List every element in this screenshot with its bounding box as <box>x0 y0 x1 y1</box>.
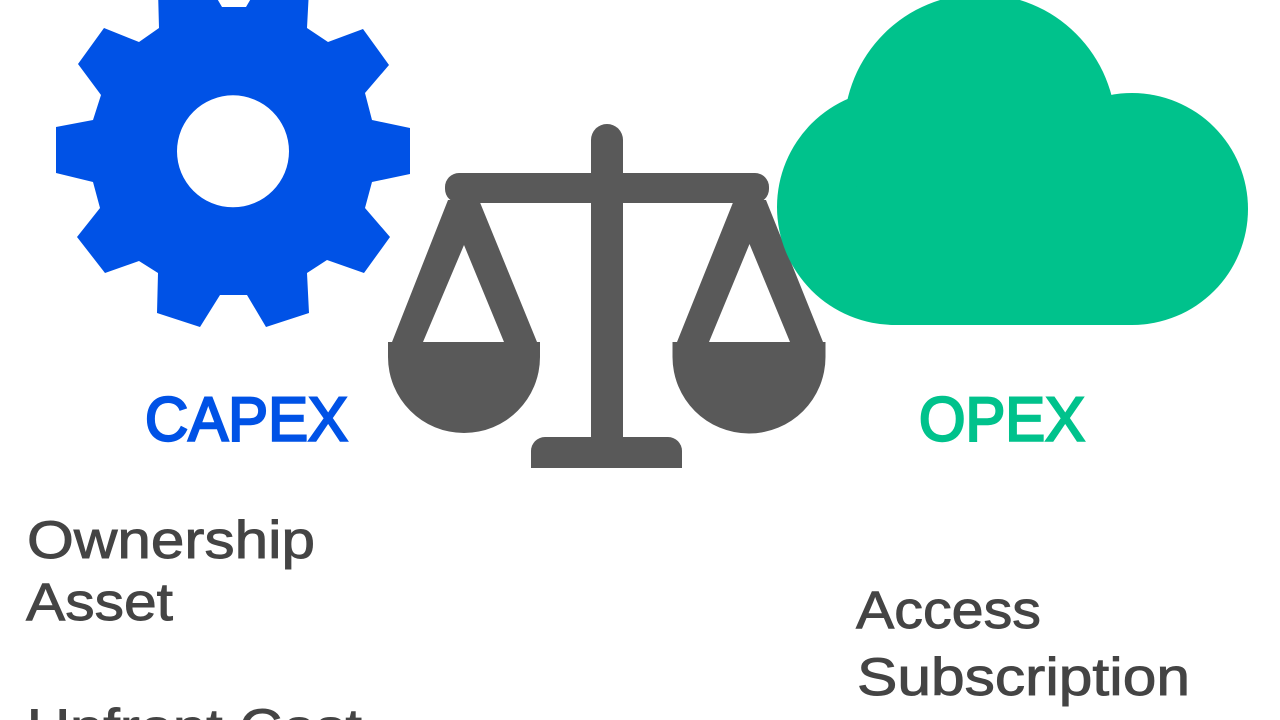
label: Ownership: Ownership <box>27 511 315 570</box>
heading: CAPEX: CAPEX <box>145 386 348 454</box>
label: Asset: Asset <box>26 573 173 632</box>
cloud left lobe <box>777 89 1013 325</box>
scale beam <box>445 173 769 203</box>
left scale pan <box>388 200 540 433</box>
cloud middle lobe <box>844 0 1116 266</box>
scale base <box>531 437 682 468</box>
icon: cloud <box>777 0 1248 325</box>
scale post <box>591 124 623 440</box>
right scale pan <box>672 200 826 434</box>
text block: CAPEX attributes <box>26 511 362 720</box>
cloud body <box>895 150 1132 325</box>
icon: balance scale <box>388 124 826 468</box>
label: Subscription: Subscription <box>857 648 1190 707</box>
icon: gear <box>56 0 410 327</box>
text block: OPEX attributes <box>856 581 1190 707</box>
cloud right lobe <box>1016 93 1248 325</box>
label: Access: Access <box>856 581 1041 640</box>
heading: OPEX: OPEX <box>919 386 1085 454</box>
